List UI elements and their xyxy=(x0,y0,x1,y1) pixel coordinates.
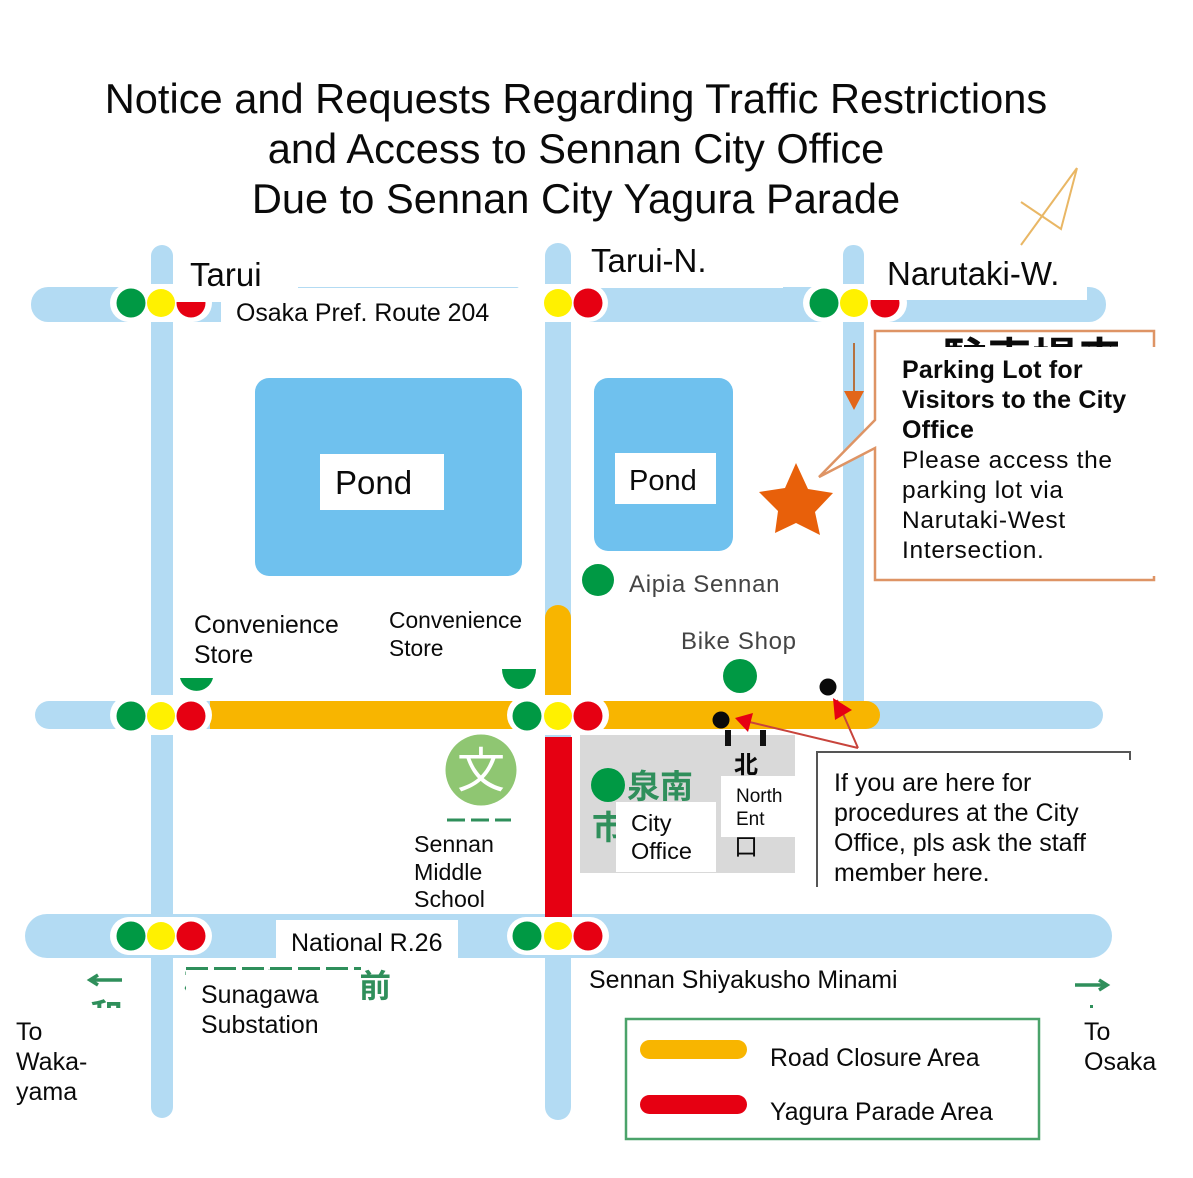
marker: right convenience store: Convenience xyxy=(389,607,522,633)
label: Sunagawa Substation xyxy=(184,968,391,1040)
marker: Bike Shop xyxy=(681,628,797,693)
pond label right: Pond xyxy=(629,465,697,497)
marker: staff point at north entrance xyxy=(712,712,730,728)
label: Narutaki-W: Narutaki-W. xyxy=(887,255,1059,292)
label: Sennan Middle School xyxy=(414,831,494,912)
panel: city office block: 口 xyxy=(734,834,758,861)
label: Narutaki-W xyxy=(871,247,1087,300)
pond left xyxy=(255,378,522,576)
star: parking lot xyxy=(759,463,833,535)
label: Tarui-N xyxy=(578,242,783,288)
panel: city office block: Ent xyxy=(736,809,765,830)
legend: Yagura Parade Area xyxy=(770,1099,993,1126)
marker: left convenience store: Store xyxy=(194,642,253,669)
road closure area xyxy=(210,605,880,729)
callout: parking lot: Please access the xyxy=(902,447,1113,474)
panel: city office block: 市 xyxy=(592,809,625,846)
road network xyxy=(25,243,1112,1120)
label: To Wakayama: 和 xyxy=(90,997,123,1034)
callout: parking lot xyxy=(819,331,1168,580)
marker: left convenience store xyxy=(180,612,339,691)
marker: Aipia Sennan: Aipia Sennan xyxy=(629,571,780,598)
marker: staff point at road xyxy=(820,678,836,696)
marker: right convenience store xyxy=(389,607,536,689)
pond label right xyxy=(615,453,716,504)
label: Sunagawa Substation: Substation xyxy=(201,1011,319,1039)
label: To Osaka: To xyxy=(1084,1018,1110,1046)
legend: Road Closure Area xyxy=(770,1045,980,1072)
icon: school: 文 xyxy=(457,745,505,798)
callout: staff: Office, pls ask the staff xyxy=(834,829,1086,857)
marker: Aipia Sennan xyxy=(582,564,780,598)
callout: staff: If you are here for xyxy=(834,769,1031,797)
traffic light: bottom centre xyxy=(507,917,609,955)
label: To Osaka: Osaka xyxy=(1084,1048,1156,1076)
panel: city office block: 泉南 xyxy=(627,768,693,805)
callout: parking lot: Parking Lot for xyxy=(902,356,1083,384)
label: To Wakayama: yama xyxy=(16,1078,77,1106)
title: and Access to Sennan City Office xyxy=(268,125,884,172)
callout: parking lot: Narutaki-West xyxy=(902,507,1066,534)
panel: city office block: 北 xyxy=(734,752,758,779)
callout: parking lot: Intersection. xyxy=(902,537,1045,564)
panel: city office block xyxy=(580,730,796,873)
callout: staff xyxy=(817,752,1130,887)
traffic light: Tarui-N xyxy=(510,284,608,322)
callout: parking lot: 駐車場来 xyxy=(942,334,1122,385)
panel: city office block: City xyxy=(631,810,672,836)
traffic light: Narutaki-W xyxy=(803,284,907,322)
marker: Bike Shop: Bike Shop xyxy=(681,628,797,655)
pond right xyxy=(594,378,733,551)
label: Sennan Middle School: Sennan xyxy=(414,831,494,857)
arrows: to staff points xyxy=(735,698,858,748)
label: Sennan Shiyakusho Minami: Sennan Shiyakusho Minami xyxy=(589,966,898,994)
marker: right convenience store: Store xyxy=(389,635,444,661)
title: Notice and Requests Regarding Traffic Restrictions xyxy=(105,75,1047,122)
label: Tarui xyxy=(176,240,545,334)
title xyxy=(105,75,1047,222)
label: To Osaka xyxy=(1075,980,1156,1076)
label: Osaka Pref. Route 204: Osaka Pref. Route 204 xyxy=(236,299,489,327)
label: To Wakayama xyxy=(10,975,125,1108)
traffic light: centre left xyxy=(110,695,212,735)
panel: city office block: Office xyxy=(631,838,692,864)
label: National R.26 xyxy=(276,920,458,962)
label: Sennan Middle School: School xyxy=(414,886,485,912)
marker: left convenience store: Convenience xyxy=(194,612,339,639)
legend xyxy=(626,1019,1039,1139)
traffic light: centre xyxy=(507,695,609,735)
label: Sennan Middle School: Middle xyxy=(414,859,482,885)
label: National R.26: National R.26 xyxy=(291,929,442,957)
yagura parade route xyxy=(545,737,572,917)
callout: parking lot: Visitors to the City xyxy=(902,386,1126,414)
icon: north arrow xyxy=(1021,168,1077,245)
label: To Wakayama: To xyxy=(16,1018,42,1046)
callout: staff: procedures at the City xyxy=(834,799,1079,827)
callout: parking lot: parking lot via xyxy=(902,477,1064,504)
pond label left: Pond xyxy=(335,464,412,501)
label: Sunagawa Substation: Sunagawa xyxy=(201,981,319,1009)
pond label left xyxy=(320,454,444,510)
callout: staff: member here. xyxy=(834,859,990,887)
label: Tarui: Tarui xyxy=(190,256,262,293)
label: To Wakayama: Waka- xyxy=(16,1048,87,1076)
title: Due to Sennan City Yagura Parade xyxy=(252,175,900,222)
icon: school xyxy=(446,734,516,820)
label: Tarui-N: Tarui-N. xyxy=(591,242,707,279)
traffic light: Tarui xyxy=(110,284,212,322)
arrow: access direction xyxy=(844,343,864,410)
label: Sunagawa Substation: 砂川変電所前 xyxy=(184,968,391,1004)
callout: parking lot: Office xyxy=(902,416,974,444)
traffic light: bottom left xyxy=(110,917,212,955)
panel: city office block: North xyxy=(736,786,782,807)
